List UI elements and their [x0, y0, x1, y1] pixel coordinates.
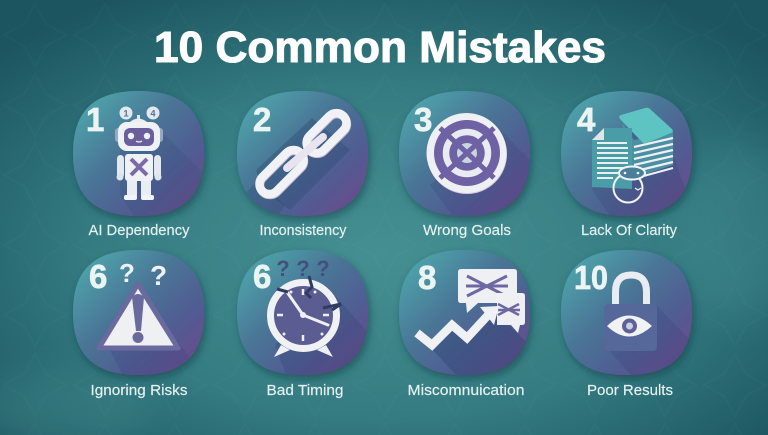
- label: Bad Timing: [266, 382, 344, 399]
- panel: Poor Results: [561, 250, 705, 399]
- number 6: 6: [89, 258, 107, 295]
- title: 10 Common Mistakes: [154, 23, 606, 72]
- icon: warning triangle: [99, 284, 178, 348]
- label: Miscomnuication: [408, 382, 524, 399]
- panel: AI Dependency: [72, 91, 209, 238]
- icon: question marks: ?: [276, 256, 290, 281]
- label: Lack Of Clarity: [581, 222, 677, 239]
- number 4: 4: [577, 101, 596, 138]
- icon: question marks: ?: [296, 256, 310, 281]
- icon: document stack and confused head: [592, 108, 673, 202]
- panel: Wrong Goals: [398, 91, 535, 238]
- icon: question marks: [276, 256, 330, 281]
- label: Ignoring Risks: [90, 382, 188, 399]
- icon: robot: [115, 106, 163, 200]
- number 1: 1: [86, 101, 104, 138]
- label: Inconsistency: [260, 222, 347, 239]
- panel: Lack Of Clarity: [561, 91, 700, 239]
- number 10: 10: [574, 259, 608, 296]
- panel: Bad Timing: [237, 250, 375, 399]
- number 3: 3: [414, 101, 432, 138]
- icon: question marks: ?: [316, 256, 330, 281]
- icon: broken chain link: [255, 109, 351, 199]
- label: Poor Results: [587, 382, 673, 399]
- number 6: 6: [253, 258, 271, 295]
- icon: robot: 1: [123, 108, 129, 118]
- icon: crossed chat bubbles: [458, 269, 525, 333]
- panel: Inconsistency: [225, 91, 368, 240]
- icon: question marks: ?: [119, 258, 135, 288]
- icon: question marks: [119, 258, 167, 291]
- number 8: 8: [418, 259, 436, 296]
- panel: Miscommunication: [399, 250, 540, 399]
- icon: crossed target: [426, 113, 507, 194]
- panel: Ignoring Risks: [73, 250, 210, 399]
- label: Wrong Goals: [423, 222, 511, 239]
- icon: lock with eye: [604, 275, 657, 351]
- label: AI Dependency: [88, 222, 190, 239]
- icon: robot: 4: [150, 108, 156, 118]
- number 2: 2: [253, 101, 271, 138]
- icon: question marks: ?: [150, 260, 167, 291]
- icon: zigzag arrow: [417, 306, 499, 345]
- icon: cracked alarm clock: [270, 276, 341, 357]
